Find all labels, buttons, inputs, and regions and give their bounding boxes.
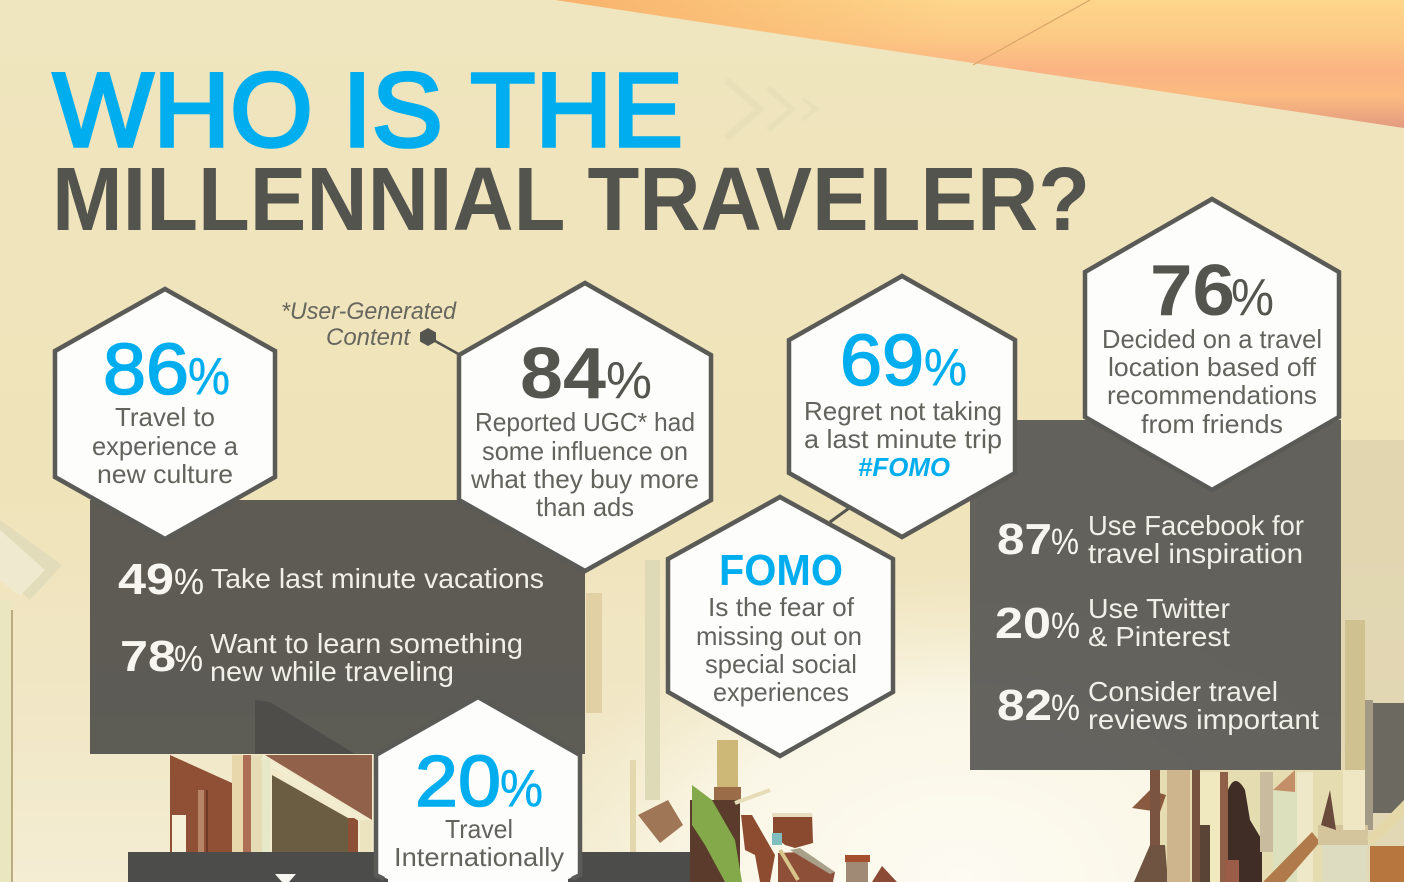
hexagon: FOMO — [668, 497, 893, 756]
hexagon: 20%: % — [500, 760, 543, 818]
hexagon: 20%: 20 — [415, 742, 501, 822]
hexagon: 86%: % — [188, 348, 230, 406]
title line 2: MILLENNIAL TRAVELER? — [52, 150, 1090, 250]
sunset sky — [555, 0, 1404, 128]
stat 82%: Consider travel — [1088, 676, 1278, 707]
hexagon: 84%: than ads — [536, 492, 634, 522]
stat 87%: Use Facebook for — [1088, 510, 1304, 541]
stat 78% — [120, 628, 523, 687]
stat 20% — [995, 593, 1230, 652]
stat 82%: % — [1051, 687, 1080, 728]
stat 49%: Take last minute vacations — [211, 563, 544, 594]
hexagon: 76% — [1085, 199, 1339, 490]
icon: chevron arrows — [726, 80, 816, 138]
hexagon: 84% — [459, 283, 711, 571]
hexagon: FOMO: missing out on — [696, 621, 862, 651]
icon: white triangle — [275, 874, 296, 882]
left building — [0, 520, 683, 882]
stat 82%: reviews important — [1088, 704, 1319, 735]
stat 49% — [118, 555, 544, 604]
hexagon: 84%: % — [606, 352, 652, 410]
hexagon: FOMO: experiences — [713, 677, 849, 707]
panel: right stats — [970, 420, 1341, 770]
stat 20%: 20 — [995, 599, 1051, 648]
stat 87% — [997, 510, 1304, 569]
stat 78%: 78 — [120, 632, 176, 681]
hexagon: 20%: Travel — [445, 814, 513, 844]
connector: UGC note to hexagon — [420, 328, 462, 356]
hexagon: 86% — [55, 289, 275, 539]
stat 20%: & Pinterest — [1088, 621, 1230, 652]
hexagon: 84%: Reported UGC* had — [475, 407, 695, 437]
title line 1: WHO IS THE — [53, 52, 683, 169]
hexagon: 76%: Decided on a travel — [1102, 324, 1322, 354]
hexagon: 76%: 76 — [1150, 251, 1235, 331]
hexagon: 20%: Internationally — [394, 842, 564, 872]
user-generated content note: Content — [326, 324, 411, 351]
user-generated content note — [281, 298, 457, 351]
hexagon: 20% — [376, 697, 580, 882]
distant buildings center — [690, 740, 897, 882]
stat 20%: % — [1051, 605, 1080, 646]
stat 82%: 82 — [997, 681, 1052, 730]
hexagon: 86%: new culture — [97, 459, 233, 489]
hexagon: 84%: 84 — [520, 334, 606, 414]
user-generated content note: *User-Generated — [281, 298, 457, 325]
stat 78%: Want to learn something — [210, 628, 523, 659]
right buildings — [1132, 440, 1404, 882]
stat 82% — [997, 676, 1319, 735]
hexagon: 76%: location based off — [1108, 352, 1317, 382]
hexagon: 69%: a last minute trip — [804, 424, 1002, 454]
stat 78%: new while traveling — [210, 656, 454, 687]
connector: FOMO link — [830, 506, 852, 522]
hexagon: 86%: 86 — [103, 330, 189, 410]
hexagon: 76%: % — [1231, 269, 1274, 327]
hexagon: 69%: #FOMO — [858, 452, 950, 482]
hexagon: 86%: experience a — [92, 431, 239, 461]
hexagon: 69% — [789, 276, 1015, 537]
hexagon: 86%: Travel to — [115, 402, 215, 432]
hexagon: 69%: 69 — [840, 321, 924, 401]
hexagon: 69%: % — [924, 339, 967, 397]
stat 20%: Use Twitter — [1088, 593, 1230, 624]
stat 87%: 87 — [997, 515, 1052, 564]
hexagon: 84%: what they buy more — [470, 464, 699, 494]
stat 49%: % — [174, 561, 204, 602]
hexagon: 76%: recommendations — [1107, 380, 1317, 410]
hexagon: FOMO: Is the fear of — [708, 592, 855, 622]
title — [52, 52, 1090, 250]
hexagon: FOMO: special social — [705, 649, 857, 679]
hexagon: 69%: Regret not taking — [804, 396, 1002, 426]
stat 78%: % — [174, 638, 203, 679]
stat 49%: 49 — [118, 555, 174, 604]
panel: bottom bar — [128, 852, 690, 882]
hexagon: 84%: some influence on — [482, 436, 688, 466]
hexagon: 76%: from friends — [1141, 409, 1283, 439]
hexagon: FOMO: FOMO — [719, 546, 843, 595]
stat 87%: travel inspiration — [1088, 538, 1303, 569]
stat 87%: % — [1051, 521, 1079, 562]
panel: left stats — [90, 500, 585, 754]
